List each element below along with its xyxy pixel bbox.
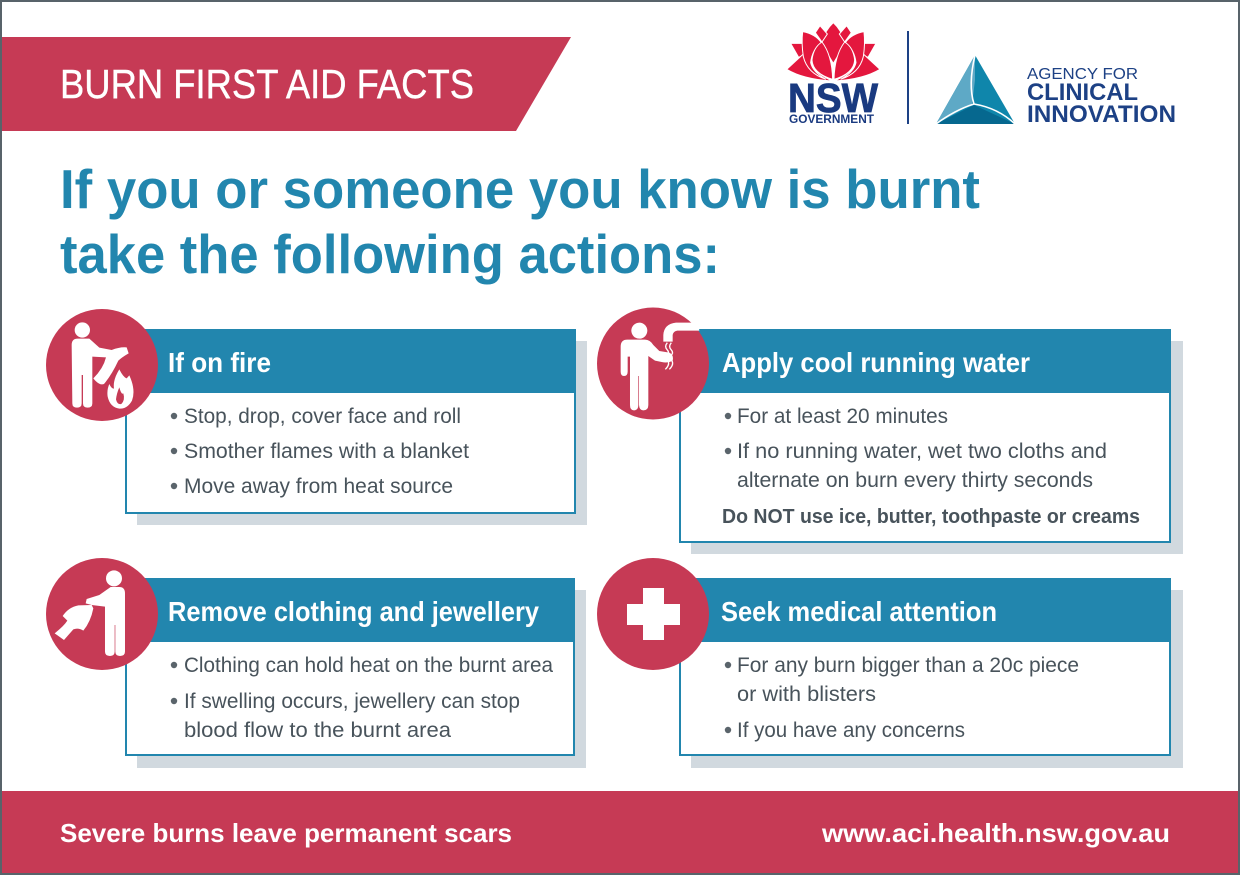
logo: Agency for Clinical Innovation: CLINICAL [1027,79,1138,106]
heading: Apply cool running water [722,347,1030,378]
bullet list [171,405,469,498]
footer message: Severe burns leave permanent scars [60,818,512,848]
bullet list: or with blisters [737,683,876,706]
panel: remove clothing and jewellery [125,578,586,768]
icon: waratah flower [787,23,880,81]
heading: If on fire [168,347,271,378]
panel: if on fire [125,329,587,525]
bullet list: blood flow to the burnt area [184,719,451,742]
icon: person smothering fire [46,309,158,421]
NSW wordmark: NSW [788,75,878,121]
icon: medical cross [597,558,709,670]
title: take the following actions: [60,223,720,285]
logo: Agency for Clinical Innovation [936,55,1176,128]
bullet list: For at least 20 minutes [737,405,948,428]
logo: NSW Government [787,23,880,126]
GOVERNMENT wordmark: GOVERNMENT [789,114,874,126]
bullet list: alternate on burn every thirty seconds [737,469,1093,492]
title: If you or someone you know is burnt [60,158,980,220]
bullet list [171,654,553,742]
footer band [2,791,1238,873]
logo: Agency for Clinical Innovation: AGENCY FOR [1027,66,1138,83]
warning: Do NOT use ice, butter, toothpaste or creams [722,506,1140,528]
icon: triangle [936,55,1015,124]
panel: seek medical attention [679,578,1183,768]
icon: person removing clothing [46,558,158,670]
heading: Remove clothing and jewellery [168,596,540,627]
title [60,158,980,285]
bullet list [725,654,1079,742]
logo divider [907,31,909,124]
icon: person with burn under tap [597,308,709,420]
bullet list: Clothing can hold heat on the burnt area [184,654,553,677]
bullet list: Smother flames with a blanket [184,440,469,463]
bullet list: If swelling occurs, jewellery can stop [184,690,520,713]
bullet list: If you have any concerns [737,719,965,742]
heading: Seek medical attention [721,596,997,627]
banner: burn first aid facts [2,37,571,131]
bullet list: Move away from heat source [184,475,453,498]
banner: burn first aid facts: BURN FIRST AID FACTS [60,61,474,107]
footer url: www.aci.health.nsw.gov.au [821,818,1170,848]
bullet list [725,405,1107,492]
bullet list: For any burn bigger than a 20c piece [737,654,1079,677]
bullet list: If no running water, wet two cloths and [737,440,1107,463]
logo: Agency for Clinical Innovation: INNOVATION [1027,101,1176,128]
panel: apply cool running water [679,329,1183,554]
bullet list: Stop, drop, cover face and roll [184,405,461,428]
